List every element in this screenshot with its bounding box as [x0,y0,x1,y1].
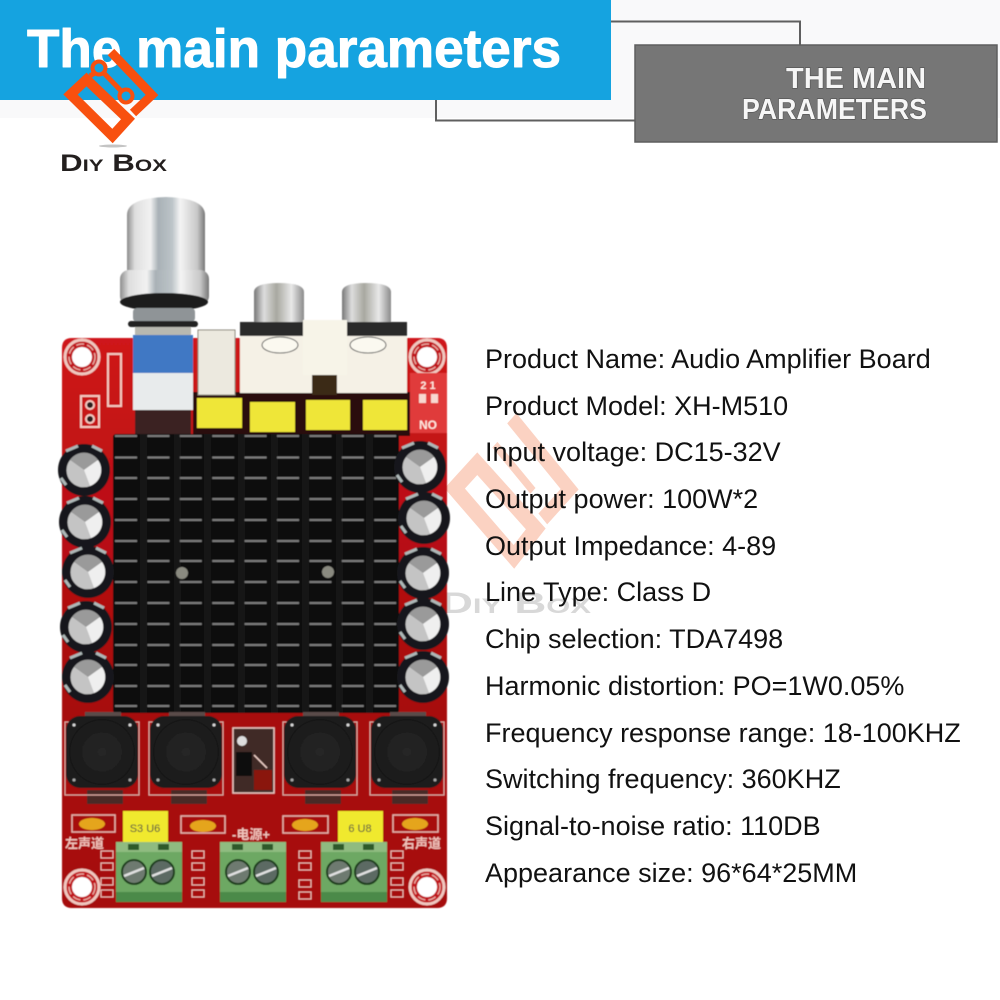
on switch: NO [419,418,437,432]
specification list: Output Impedance: 4-89 [485,531,776,561]
RCA housing [240,320,407,395]
blue title banner [0,0,611,100]
white connector [198,330,235,395]
red PCB [62,338,447,908]
inductors [65,712,444,804]
RCA sockets [254,283,391,324]
specification list: Switching frequency: 360KHZ [485,764,841,794]
on switch: 2 1 [420,380,436,392]
silkscreen labels: 左声道 [65,836,104,851]
logo text: Diy Box [60,150,168,177]
ceramic capacitors [79,818,428,832]
specification list: Harmonic distortion: PO=1W0.05% [485,671,904,701]
faint watermark: Diy Box [441,587,591,620]
specification list: Signal-to-noise ratio: 110DB [485,811,821,841]
DIY Box logo [60,52,168,177]
potentiometer body [133,335,193,435]
jumper pads [81,354,121,427]
silkscreen labels: -电源+ [232,827,270,842]
green screw terminals [116,842,387,902]
ceramic capacitor outlines [72,815,438,833]
specification list: Input voltage: DC15-32V [485,437,781,467]
silkscreen labels: 右声道 [402,836,441,851]
logo shadow [99,144,127,148]
dark area behind connectors [193,392,410,436]
logo icon [70,52,152,136]
mounting hole bottom right [409,869,445,905]
on switch [410,373,447,433]
yellow film capacitors [197,398,407,432]
specification list: Line Type: Class D [485,577,711,607]
top header light band [0,0,1000,118]
yellow output capacitors: S3 U6 [130,823,160,835]
SMD pads [101,851,403,899]
electrolytic capacitors right [394,441,450,703]
specification list: Frequency response range: 18-100KHZ [485,718,961,748]
faint watermark [441,418,591,620]
specification list: Product Model: XH-M510 [485,391,788,421]
specification list: Appearance size: 96*64*25MM [485,858,857,888]
product photo: amplifier board [58,197,450,908]
specification list: Product Name: Audio Amplifier Board [485,344,931,374]
specification list: Output power: 100W*2 [485,484,758,514]
electrolytic capacitors left [58,444,114,703]
silkscreen labels [65,827,441,851]
grey connector frame [436,22,800,120]
yellow output capacitors: 6 U8 [348,823,372,835]
volume knob [120,197,209,335]
yellow output capacitors [123,811,383,842]
mounting hole bottom left [64,869,100,905]
specification list: Chip selection: TDA7498 [485,624,783,654]
grey parameters box [635,45,997,142]
grey box heading: THE MAIN [786,63,926,95]
title: The main parameters [27,19,561,79]
mounting holes [64,339,100,375]
grey box heading: PARAMETERS [742,94,927,126]
specification list [485,344,961,888]
heatsink [113,434,399,713]
centre diode block [233,728,274,793]
mounting hole top right [409,339,445,375]
